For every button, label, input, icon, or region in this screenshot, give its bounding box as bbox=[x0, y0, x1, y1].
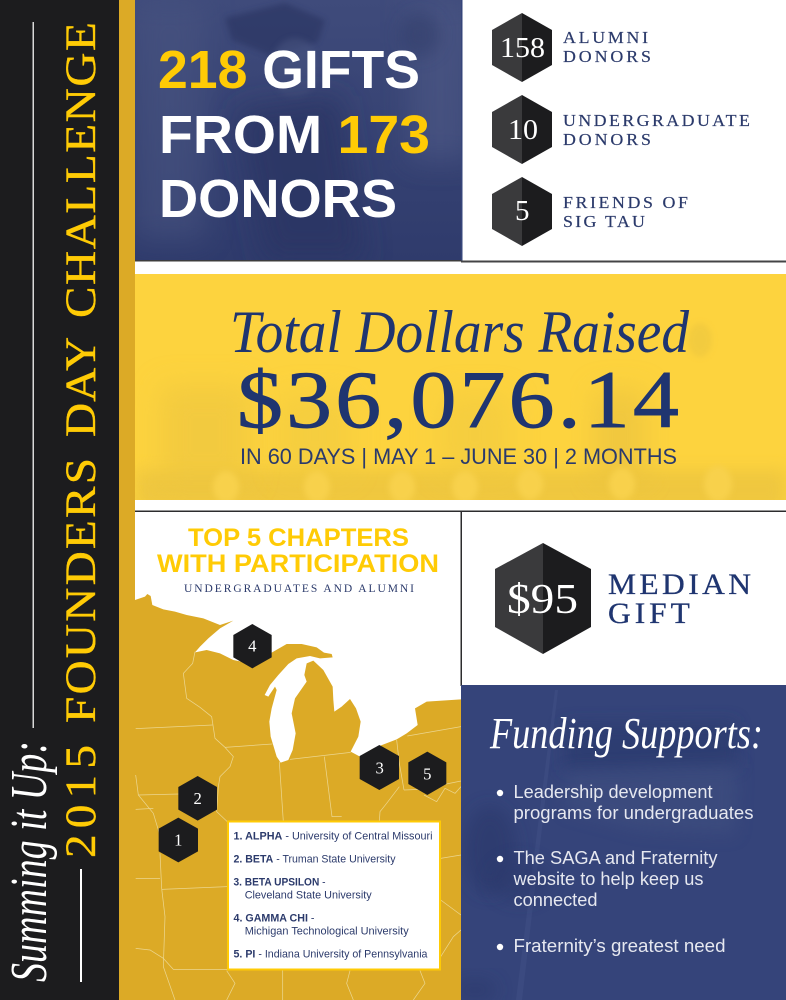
marker 2 bbox=[178, 776, 217, 821]
chapter list: 5. PI - Indiana University of Pennsylvania bbox=[234, 948, 428, 960]
chapters heading bbox=[157, 524, 439, 578]
marker 1 bbox=[159, 818, 198, 862]
undergraduate stat: UNDERGRADUATE bbox=[563, 110, 750, 130]
funding list: Fraternity’s greatest need bbox=[514, 936, 726, 956]
median hexagon bbox=[495, 543, 591, 654]
sidebar title: 2015 bbox=[57, 745, 105, 858]
state borders bbox=[136, 652, 461, 1000]
sidebar title: DAY bbox=[57, 337, 105, 437]
median hexagon: $95 bbox=[507, 577, 578, 623]
sidebar title: FOUNDERS bbox=[57, 458, 105, 723]
chapter list: Michigan Technological University bbox=[245, 926, 409, 938]
panel: donor breakdown bbox=[461, 13, 786, 262]
sidebar title bbox=[57, 22, 105, 858]
friends stat: FRIENDS OF bbox=[563, 192, 688, 212]
headline: DONORS bbox=[159, 169, 397, 229]
funding list: Leadership development bbox=[514, 782, 712, 802]
marker 2: 2 bbox=[194, 789, 202, 808]
panel: left sidebar bbox=[0, 0, 135, 1000]
chapters subheading: UNDERGRADUATES AND ALUMNI bbox=[184, 583, 414, 595]
funding list: programs for undergraduates bbox=[514, 803, 754, 823]
alumni stat: DONORS bbox=[563, 46, 651, 66]
median label: MEDIAN bbox=[608, 568, 751, 601]
marker 3: 3 bbox=[376, 758, 384, 777]
friends stat: 5 bbox=[515, 195, 530, 227]
panel: median gift bbox=[495, 543, 751, 654]
date range: IN 60 DAYS | MAY 1 – JUNE 30 | 2 MONTHS bbox=[240, 444, 677, 469]
marker 4 bbox=[233, 624, 272, 668]
alumni stat bbox=[492, 13, 651, 82]
chapter list: 1. ALPHA - University of Central Missouri bbox=[234, 830, 432, 842]
undergraduate stat bbox=[492, 95, 750, 164]
chapter list: 4. GAMMA CHI - bbox=[234, 912, 315, 924]
sidebar kicker: Summing it Up: bbox=[1, 741, 58, 982]
marker 3 bbox=[360, 745, 399, 790]
funding list: website to help keep us bbox=[512, 869, 704, 889]
panel: median gift: GIFT bbox=[608, 597, 690, 630]
chapter list: Cleveland State University bbox=[245, 890, 372, 902]
headline: FROM 173 bbox=[159, 105, 430, 165]
script heading: Total Dollars Raised bbox=[230, 299, 690, 365]
funding list bbox=[497, 782, 754, 956]
headline bbox=[158, 40, 430, 229]
marker 5: 5 bbox=[423, 764, 431, 783]
marker 1: 1 bbox=[174, 831, 182, 850]
undergraduate stat: DONORS bbox=[563, 129, 651, 149]
undergraduate stat: 10 bbox=[508, 114, 538, 146]
friends stat bbox=[492, 177, 688, 246]
panel: gifts and donors bbox=[135, 0, 470, 262]
dollar amount: $36,076.14 bbox=[237, 354, 679, 445]
map of midwest bbox=[135, 594, 461, 1000]
chapter list bbox=[228, 822, 440, 970]
alumni stat: ALUMNI bbox=[563, 27, 648, 47]
panel: funding supports bbox=[453, 685, 786, 1000]
chapter list: 3. BETA UPSILON - bbox=[234, 876, 326, 888]
headline: 218 GIFTS bbox=[158, 40, 420, 100]
funding list: connected bbox=[514, 890, 598, 910]
chapters heading: TOP 5 CHAPTERS bbox=[188, 524, 409, 552]
chapter list: 2. BETA - Truman State University bbox=[234, 854, 396, 866]
friends stat: SIG TAU bbox=[563, 211, 645, 231]
funding list: The SAGA and Fraternity bbox=[514, 848, 718, 868]
sidebar title: CHALLENGE bbox=[57, 22, 105, 318]
chapters heading: WITH PARTICIPATION bbox=[157, 550, 439, 578]
marker 4: 4 bbox=[248, 637, 257, 656]
panel: total dollars raised bbox=[135, 274, 786, 510]
marker 5 bbox=[408, 752, 446, 795]
panel: top chapters map bbox=[135, 510, 786, 1000]
alumni stat: 158 bbox=[500, 32, 545, 64]
